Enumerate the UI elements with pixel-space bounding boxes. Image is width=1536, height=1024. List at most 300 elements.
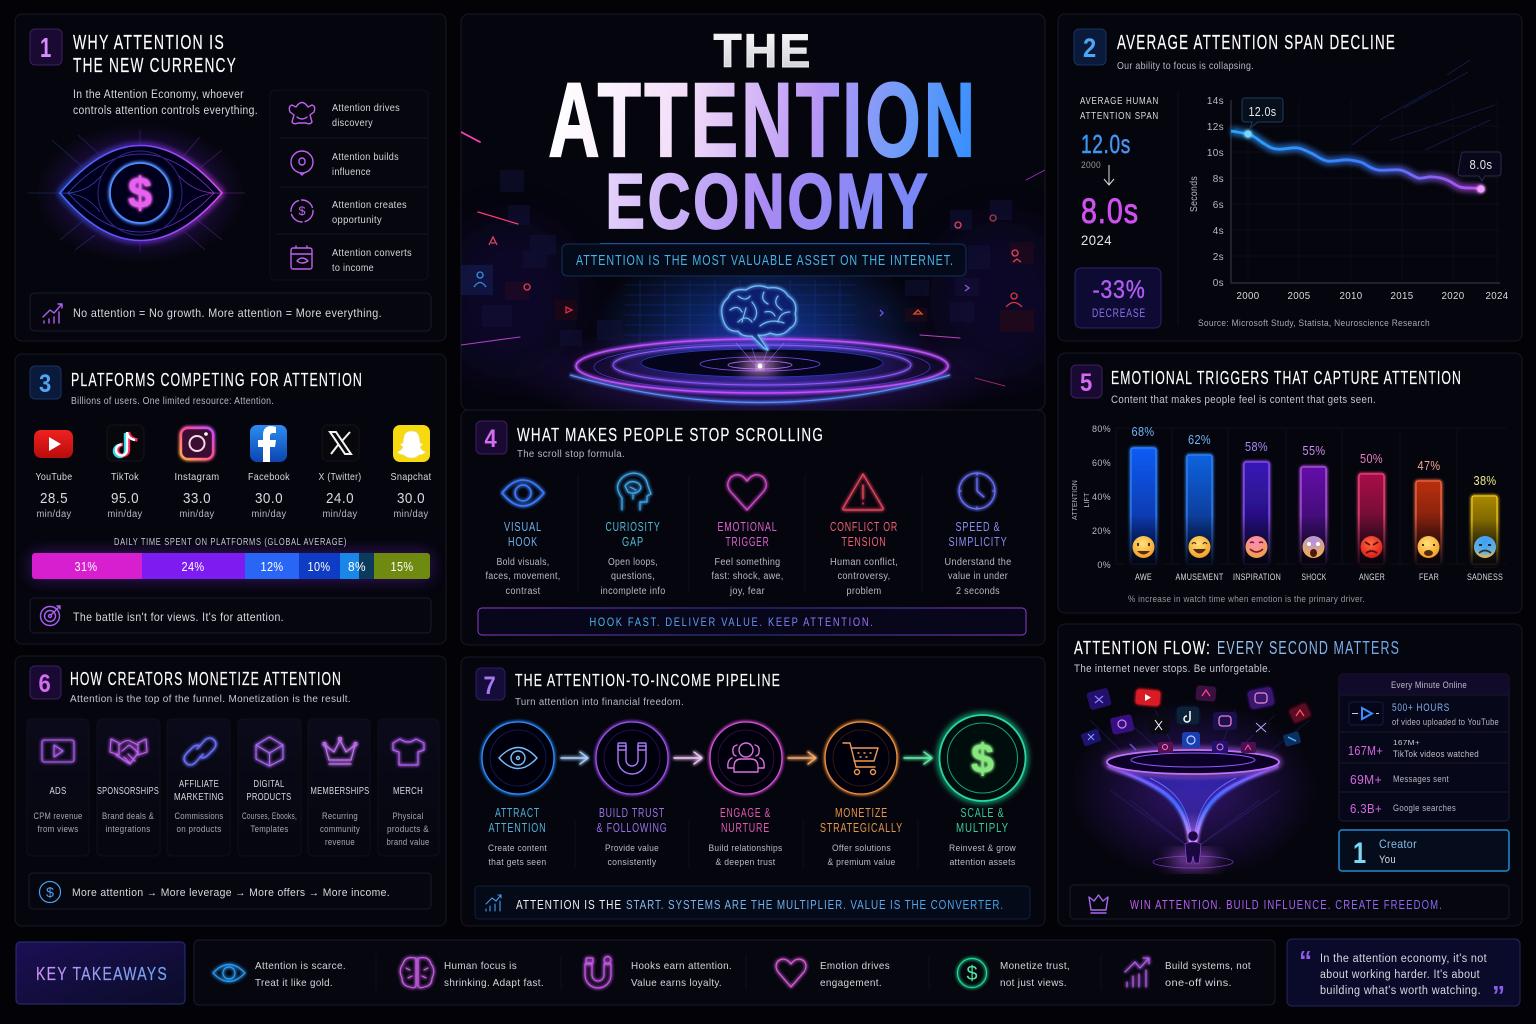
item: speed and simplicity: 2 seconds — [956, 586, 1000, 597]
line chart: attention span 2000-2024: 2s — [1213, 252, 1224, 263]
table: every minute online: Every Minute Online — [1391, 680, 1467, 690]
stacked bar: share of time: 24% — [182, 559, 204, 574]
step: engage and nurture: NURTURE — [721, 821, 770, 835]
item: visual hook: HOOK — [508, 535, 538, 549]
callout: hook fast — [478, 608, 1026, 635]
line chart: attention span 2000-2024: 6s — [1213, 200, 1224, 211]
icon: dollar — [40, 882, 60, 902]
card: merch: MERCH — [393, 786, 423, 797]
badge: number 5 — [1071, 365, 1102, 398]
row: TikTok videos: TikTok videos watched — [1393, 749, 1479, 760]
step: scale and multiply — [940, 715, 1026, 868]
stat column — [1075, 95, 1161, 328]
panel: attention-to-income pipeline — [461, 657, 1045, 926]
row: TikTok videos — [1348, 740, 1479, 760]
step: engage and nurture: & deepen trust — [716, 857, 776, 868]
platform: Instagram: min/day — [180, 509, 214, 520]
icon: growth chart — [486, 895, 501, 911]
quote box: In the attention economy, it's not — [1320, 953, 1487, 965]
arrow — [674, 752, 702, 764]
line chart: attention span 2000-2024: 2024 — [1486, 290, 1508, 302]
hero background: wall of screens — [461, 131, 1045, 410]
bar: fear: FEAR — [1419, 572, 1439, 582]
source note: Source: Microsoft Study, Statista, Neuroscience Research — [1198, 318, 1430, 329]
step: monetize strategically: STRATEGICALLY — [820, 821, 903, 835]
item: emotional trigger: Feel something — [714, 557, 780, 568]
line chart: attention span 2000-2024: 2005 — [1288, 290, 1310, 302]
panel: hero — [460, 14, 1046, 410]
platform: Instagram: 33.0 — [183, 490, 211, 507]
row: YouTube hours: of video uploaded to YouTube — [1392, 717, 1499, 727]
card: affiliate marketing — [167, 719, 230, 856]
callout: attention is the start: ATTENTION IS THE — [516, 897, 622, 912]
bar: anger: 50% — [1360, 451, 1383, 466]
callout: attention is the start: START. SYSTEMS ARE THE MULTIPLIER. VALUE IS THE CONVERTER. — [626, 897, 1004, 912]
list text: influence — [332, 166, 371, 178]
title: the attention economy: ATTENTION — [548, 62, 978, 179]
line chart: attention span 2000-2024: 2020 — [1442, 290, 1464, 302]
title: the attention economy: THE — [714, 24, 812, 77]
line chart: attention span 2000-2024: 0s — [1213, 278, 1224, 289]
item: conflict or tension: CONFLICT OR — [830, 520, 898, 534]
takeaway: attention is scarce: Treat it like gold. — [255, 977, 333, 989]
footnote: % increase in watch time when emotion is the primary driver. — [1128, 594, 1365, 604]
decor: small people/icons on screens — [474, 215, 1022, 316]
item: curiosity gap: Open loops, — [608, 557, 658, 568]
callout: no attention no growth — [30, 293, 431, 331]
step: attract attention — [482, 722, 554, 868]
callout: the battle: The battle isn't for views. It's for attention. — [73, 610, 284, 624]
step: engage and nurture: ENGAGE & — [720, 806, 771, 820]
row: YouTube hours — [1349, 702, 1499, 727]
row: searches: 6.3B+ — [1350, 801, 1382, 816]
stat column: AVERAGE HUMAN — [1080, 95, 1159, 107]
stat column: 2000 — [1081, 160, 1101, 170]
bar: shock: SHOCK — [1302, 572, 1326, 582]
icon: crown — [1089, 895, 1108, 913]
platform: X (Twitter): min/day — [322, 509, 358, 520]
step: build trust: BUILD TRUST — [599, 806, 665, 820]
line chart: attention span 2000-2024: 2010 — [1340, 290, 1362, 302]
step: scale and multiply: SCALE & — [960, 806, 1004, 820]
card: memberships: revenue — [325, 837, 355, 847]
callout: 8.0s — [1458, 152, 1501, 181]
item: speed and simplicity — [944, 473, 1012, 597]
platform: X (Twitter) — [318, 425, 362, 520]
card: memberships — [308, 719, 370, 856]
callout: 12.0s: 12.0s — [1248, 105, 1276, 119]
row: messages — [1350, 772, 1449, 787]
heading — [515, 670, 781, 708]
item: curiosity gap: questions, — [611, 571, 655, 582]
icon: growth chart — [43, 304, 62, 323]
heading: The internet never stops. Be unforgetable. — [1074, 663, 1271, 675]
platform: X (Twitter): 24.0 — [326, 490, 354, 507]
row: TikTok videos: 167M+ — [1348, 743, 1383, 758]
badge: number 6: 6 — [38, 670, 52, 698]
heading: PLATFORMS COMPETING FOR ATTENTION — [71, 370, 363, 390]
icon: glowing eye with dollar: $ — [128, 169, 152, 218]
takeaway: human focus — [400, 958, 544, 989]
list text: opportunity — [332, 214, 382, 226]
platform: TikTok: min/day — [108, 509, 142, 520]
stat column: 8.0s — [1081, 192, 1139, 231]
illustration: funnel of social icons — [1068, 685, 1318, 880]
bar: amusement: AMUSEMENT — [1176, 572, 1224, 582]
callout: win attention — [1070, 885, 1509, 919]
item: emotional trigger: joy, fear — [729, 586, 765, 597]
bar chart: attention lift by emotion: 80% — [1092, 424, 1111, 434]
step: attract attention: Create content — [488, 843, 547, 854]
platform: YouTube: 28.5 — [40, 490, 68, 507]
takeaway: attention is scarce — [213, 960, 346, 989]
subtitle banner: ATTENTION IS THE MOST VALUABLE ASSET ON THE INTERNET. — [576, 252, 954, 269]
quote box: ” — [1492, 980, 1506, 1011]
card: ads — [27, 719, 89, 856]
takeaway: monetize trust — [958, 958, 1070, 989]
platform: Facebook: Facebook — [248, 471, 290, 483]
stat column: 2024 — [1081, 232, 1112, 248]
icon: person — [1185, 831, 1201, 863]
icon: target — [40, 606, 60, 626]
stacked bar: share of time: 15% — [390, 559, 414, 574]
key takeaways label: KEY TAKEAWAYS — [36, 964, 168, 984]
takeaway: emotion: Emotion drives — [820, 960, 890, 972]
heading: The scroll stop formula. — [517, 449, 625, 460]
takeaway: monetize trust: $ — [966, 963, 978, 985]
bar: anger: ANGER — [1359, 572, 1385, 582]
platform: TikTok: 95.0 — [111, 490, 139, 507]
takeaway: build systems: Build systems, not — [1165, 960, 1251, 972]
step: monetize strategically: MONETIZE — [835, 806, 888, 820]
card: memberships: MEMBERSHIPS — [310, 786, 370, 797]
line chart: attention span 2000-2024: 2015 — [1390, 290, 1414, 302]
line chart: attention span 2000-2024: 2000 — [1236, 290, 1260, 302]
bar: amusement: 62% — [1188, 432, 1211, 447]
bar: inspiration: INSPIRATION — [1233, 572, 1281, 582]
line chart: attention span 2000-2024: Seconds — [1189, 176, 1200, 212]
quote box: “ — [1299, 945, 1313, 976]
intro text: controls attention controls everything. — [73, 105, 258, 117]
item: visual hook — [486, 480, 560, 597]
stacked bar: share of time: 31% — [74, 559, 98, 574]
item: conflict or tension: controversy, — [838, 571, 890, 582]
takeaway: hooks: Hooks earn attention. — [631, 960, 732, 972]
list text: to income — [332, 262, 374, 274]
platform: Facebook — [248, 425, 290, 520]
badge: number 1: 1 — [40, 32, 52, 63]
decor: grid behind brain — [625, 280, 855, 350]
funnel — [1108, 765, 1278, 842]
bar chart: attention lift by emotion: 0% — [1097, 560, 1111, 570]
badge: number 3: 3 — [39, 370, 52, 398]
heading — [1074, 638, 1400, 675]
item: curiosity gap — [600, 473, 666, 597]
bar: shock — [1295, 443, 1332, 582]
card: digital products: PRODUCTS — [246, 792, 292, 803]
bar chart: attention lift by emotion — [1070, 424, 1506, 582]
step: scale and multiply: MULTIPLY — [956, 821, 1009, 835]
step: scale and multiply: attention assets — [950, 857, 1016, 868]
card: affiliate marketing: MARKETING — [174, 792, 224, 803]
bar: awe: AWE — [1135, 572, 1152, 582]
card: merch: products & — [387, 824, 429, 834]
card: ads: CPM revenue — [34, 811, 82, 821]
panel: average attention span decline — [1058, 14, 1522, 341]
key takeaways label — [16, 942, 185, 1004]
row: searches — [1350, 801, 1456, 816]
list text: Attention creates — [332, 199, 407, 211]
icon: dollar: $ — [46, 884, 54, 900]
item: speed and simplicity: Understand the — [944, 557, 1012, 568]
heading — [1111, 368, 1462, 406]
list text: Attention drives — [332, 102, 400, 114]
heading — [70, 669, 351, 705]
item: speed and simplicity: value in under — [948, 571, 1008, 582]
bar: sadness: 38% — [1474, 473, 1496, 488]
panel: how creators monetize attention — [15, 656, 446, 926]
callout: 8.0s: 8.0s — [1470, 158, 1492, 172]
takeaway: build systems — [1125, 958, 1251, 989]
arrow: decline — [1104, 165, 1114, 185]
line chart: attention span 2000-2024: 14s — [1207, 96, 1224, 107]
card: merch — [378, 719, 439, 856]
step: engage and nurture: Build relationships — [708, 843, 782, 854]
callout: 12.0s — [1242, 98, 1283, 128]
subtitle banner — [562, 244, 966, 276]
platform: TikTok — [107, 425, 144, 520]
line chart: attention span 2000-2024 — [1189, 60, 1508, 302]
callout: one creator: 1 — [1353, 837, 1367, 870]
bar chart: attention lift by emotion: LIFT — [1082, 492, 1091, 508]
item: speed and simplicity: SIMPLICITY — [948, 535, 1008, 549]
step: build trust: consistently — [608, 857, 656, 868]
heading: EVERY SECOND MATTERS — [1217, 638, 1400, 658]
platform: Instagram: Instagram — [174, 471, 220, 483]
step: attract attention: ATTRACT — [495, 806, 540, 820]
badge: number 5: 5 — [1080, 369, 1093, 397]
badge: number 2: 2 — [1083, 33, 1097, 63]
stacked bar: share of time: 12% — [260, 559, 284, 574]
line chart: attention span 2000-2024: 8s — [1213, 174, 1224, 185]
panel: emotional triggers — [1058, 353, 1522, 613]
item: visual hook: VISUAL — [504, 520, 542, 534]
callout: attention is the start — [475, 886, 1030, 919]
badge: number 4: 4 — [484, 425, 498, 453]
stacked bar: share of time: 8% — [348, 559, 366, 574]
card: digital products — [238, 719, 301, 856]
card: merch: Physical — [392, 811, 424, 821]
takeaway: human focus: Human focus is — [444, 960, 517, 972]
callout: hook fast: HOOK FAST. DELIVER VALUE. KEEP ATTENTION. — [590, 615, 874, 629]
heading: Turn attention into financial freedom. — [515, 697, 684, 708]
item: curiosity gap: CURIOSITY — [606, 520, 660, 534]
bar chart: attention lift by emotion: 20% — [1092, 526, 1111, 536]
icon: opportunity — [291, 200, 313, 222]
platform: Snapchat: Snapchat — [390, 471, 432, 483]
bar: anger — [1353, 451, 1390, 582]
row: messages: Messages sent — [1393, 774, 1449, 784]
stacked bar: share of time — [32, 553, 430, 579]
panel: platforms competing for attention — [15, 354, 446, 644]
card: digital products: Templates — [250, 824, 289, 834]
arrow — [788, 752, 816, 764]
step: monetize strategically: & premium value — [828, 857, 896, 868]
item: speed and simplicity: SPEED & — [956, 520, 1000, 534]
platform: Snapchat — [390, 425, 432, 520]
bar: sadness: SADNESS — [1467, 572, 1503, 582]
stacked bar: share of time: 10% — [308, 559, 330, 574]
callout: minus 33 percent: DECREASE — [1092, 306, 1146, 320]
arrow — [904, 752, 932, 764]
platform: YouTube: min/day — [36, 509, 72, 520]
rings platform — [570, 339, 950, 402]
item: emotional trigger: fast: shock, awe, — [712, 571, 784, 582]
icon: opportunity: $ — [298, 204, 306, 218]
panel: why attention is the new currency — [15, 14, 446, 341]
step: build trust: & FOLLOWING — [596, 821, 668, 835]
item: conflict or tension: Human conflict, — [830, 557, 898, 568]
item: curiosity gap: incomplete info — [600, 586, 666, 597]
bar chart: attention lift by emotion: 60% — [1092, 458, 1111, 468]
heading: Attention is the top of the funnel. Monetization is the result. — [70, 693, 351, 705]
list text — [332, 102, 412, 274]
table: every minute online — [1339, 674, 1509, 821]
takeaway: emotion — [776, 959, 890, 989]
card: ads: from views — [38, 824, 79, 834]
heading: Billions of users. One limited resource: Attention. — [71, 396, 274, 407]
card: sponsorships: Brand deals & — [102, 811, 154, 821]
callout: one creator — [1339, 830, 1509, 871]
item: conflict or tension: TENSION — [842, 535, 886, 549]
step: build trust: Provide value — [605, 843, 659, 854]
callout: one creator: You — [1379, 854, 1396, 866]
bar: inspiration — [1233, 439, 1281, 582]
icon: discovery — [289, 102, 315, 124]
heading — [517, 425, 824, 460]
line chart: attention span 2000-2024: 4s — [1213, 226, 1224, 237]
panel: what makes people stop scrolling — [461, 410, 1045, 645]
takeaway: human focus: shrinking. Adapt fast. — [444, 977, 544, 989]
takeaway: attention is scarce: Attention is scarce. — [255, 960, 346, 972]
intro text: In the Attention Economy, whoever — [73, 89, 244, 101]
platform: Snapchat: min/day — [394, 509, 428, 520]
item: visual hook: faces, movement, — [486, 571, 560, 582]
platform: Facebook: min/day — [252, 509, 286, 520]
heading: ATTENTION FLOW: — [1074, 638, 1211, 658]
bar: shock: 55% — [1302, 443, 1326, 458]
takeaway: build systems: one-off wins. — [1165, 977, 1232, 989]
bar: amusement — [1176, 432, 1224, 582]
step: attract attention: ATTENTION — [488, 821, 546, 835]
badge: number 1 — [30, 29, 62, 65]
card: affiliate marketing: Commissions — [174, 811, 224, 821]
badge: number 2 — [1074, 29, 1106, 65]
title: the attention economy — [548, 24, 978, 245]
platform: Snapchat: 30.0 — [397, 490, 425, 507]
step: build trust — [596, 722, 668, 868]
step: monetize strategically — [820, 722, 903, 868]
heading: THE ATTENTION-TO-INCOME PIPELINE — [515, 670, 781, 690]
takeaway: hooks: Value earns loyalty. — [631, 977, 722, 989]
item: emotional trigger — [712, 475, 784, 597]
bar: fear — [1410, 458, 1447, 582]
callout: one creator: Creator — [1379, 837, 1417, 851]
card: affiliate marketing: AFFILIATE — [179, 779, 219, 790]
takeaway: monetize trust: not just views. — [1000, 977, 1067, 989]
takeaway: monetize trust: Monetize trust, — [1000, 960, 1070, 972]
callout: minus 33 percent: -33% — [1092, 276, 1146, 304]
bar: awe — [1125, 424, 1162, 582]
line chart: attention span 2000-2024: 12s — [1207, 122, 1224, 133]
heading — [71, 370, 363, 407]
card: digital products: Courses, Ebooks, — [242, 811, 297, 821]
heading: why attention is the new currency — [73, 32, 237, 77]
badge: number 4 — [476, 421, 507, 454]
bar: fear: 47% — [1418, 458, 1440, 473]
callout: more attention — [29, 873, 431, 909]
platform: TikTok: TikTok — [111, 471, 139, 483]
bar chart: attention lift by emotion: ATTENTION — [1070, 480, 1079, 520]
heading: Content that makes people feel is content that gets seen. — [1111, 394, 1376, 406]
list text: Attention builds — [332, 151, 399, 163]
row: messages: 69M+ — [1350, 772, 1382, 787]
icon: glowing eye with dollar — [28, 123, 245, 263]
card: ads: ADS — [50, 786, 66, 797]
line chart: attention span 2000-2024: 10s — [1207, 148, 1224, 159]
badge: number 7: 7 — [484, 672, 496, 700]
intro text — [73, 89, 258, 117]
title: the attention economy: ECONOMY — [606, 157, 930, 245]
callout: more attention: More attention → More leverage → More offers → More income. — [72, 887, 390, 899]
card: affiliate marketing: on products — [176, 824, 222, 834]
card: memberships: Recurring — [322, 811, 358, 821]
step: attract attention: that gets seen — [488, 857, 546, 868]
list text: Attention converts — [332, 247, 412, 259]
badge: number 6 — [30, 666, 61, 699]
stat column: 12.0s — [1081, 129, 1131, 159]
step: engage and nurture — [708, 722, 782, 868]
takeaway: hooks — [585, 956, 732, 989]
quote box: about working harder. It's about — [1320, 969, 1480, 981]
decor: neon streaks — [461, 132, 1045, 386]
row: TikTok videos: 167M+ — [1393, 740, 1420, 747]
step: scale and multiply: $ — [971, 735, 994, 782]
badge: number 3 — [30, 366, 61, 399]
bar: sadness — [1466, 473, 1503, 582]
bar: awe: 68% — [1132, 424, 1154, 439]
callout: the battle — [30, 598, 431, 633]
quote box: building what's worth watching. — [1320, 985, 1481, 997]
card: merch: brand value — [386, 837, 430, 847]
quote box — [1287, 939, 1520, 1011]
icon: income — [291, 246, 312, 269]
card: sponsorships: integrations — [106, 824, 151, 834]
item: emotional trigger: TRIGGER — [726, 535, 770, 549]
heading — [1117, 32, 1396, 72]
step: scale and multiply: Reinvest & grow — [949, 843, 1016, 854]
item: curiosity gap: GAP — [622, 535, 644, 549]
item: conflict or tension: problem — [846, 586, 882, 597]
platform: YouTube — [34, 430, 73, 520]
row: YouTube hours: 500+ HOURS — [1392, 702, 1450, 714]
heading: Our ability to focus is collapsing. — [1117, 61, 1254, 72]
callout: minus 33 percent — [1075, 268, 1161, 328]
floating icons — [1080, 685, 1311, 753]
platform: YouTube: YouTube — [36, 471, 72, 483]
card: digital products: DIGITAL — [254, 779, 285, 790]
bar: inspiration: 58% — [1245, 439, 1268, 454]
